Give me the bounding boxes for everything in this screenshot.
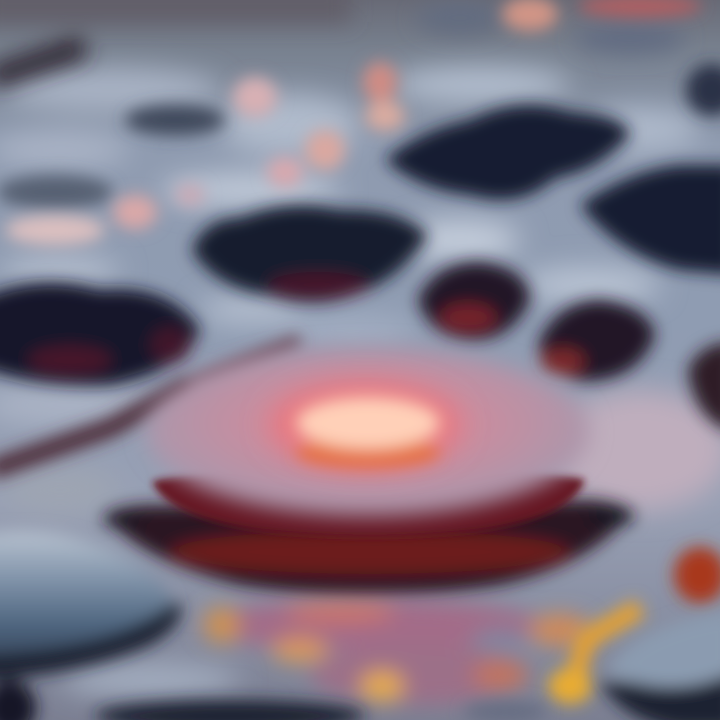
lower lava cracks <box>200 599 590 705</box>
lower stones <box>0 531 720 720</box>
glow <box>270 383 460 467</box>
stone left <box>0 283 200 385</box>
stones bottom edge <box>0 680 547 720</box>
dark stones <box>0 105 720 432</box>
pink spots <box>5 0 702 245</box>
dish body <box>146 348 590 516</box>
dish rim shadow <box>103 500 634 596</box>
small dark stones upper <box>0 64 720 209</box>
stone upper right <box>385 105 630 200</box>
dish upper red lip <box>152 470 585 537</box>
stone far right <box>580 165 720 275</box>
stone mid <box>418 262 530 340</box>
stone lower left <box>0 531 181 680</box>
stone lower right <box>600 610 720 720</box>
sticks <box>0 340 300 470</box>
top dark band <box>0 0 685 78</box>
stone right edge <box>688 342 720 432</box>
central dish <box>103 348 634 596</box>
stone mid right <box>538 300 655 381</box>
stone centre <box>192 206 428 302</box>
